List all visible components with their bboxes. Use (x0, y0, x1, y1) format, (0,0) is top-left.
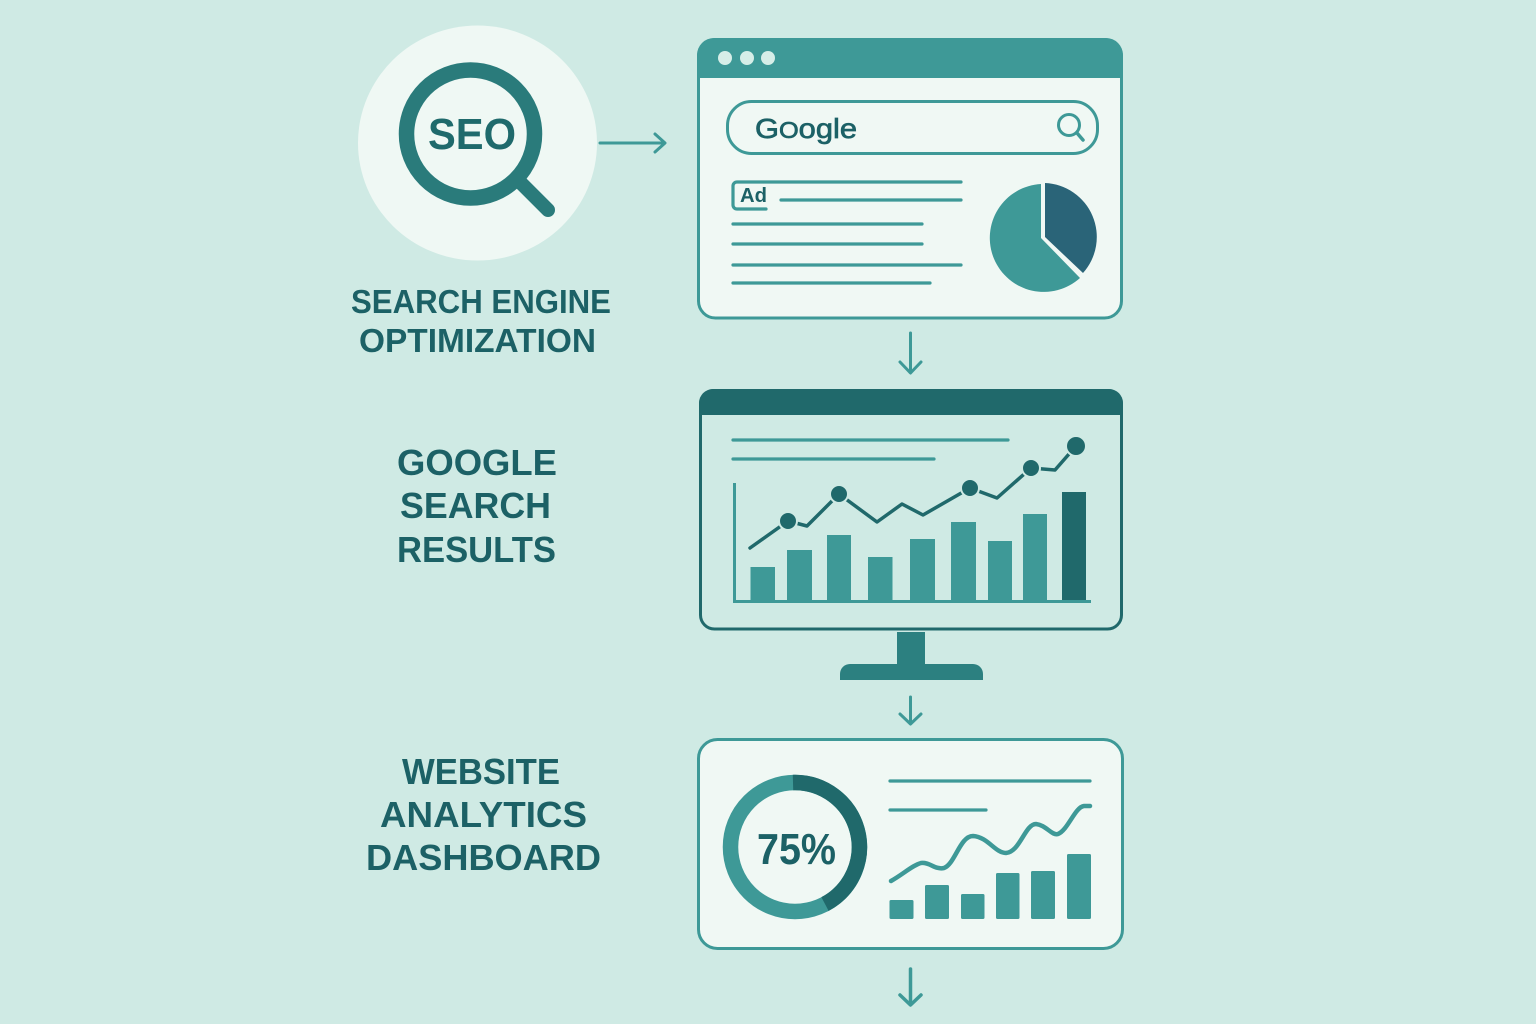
heading: website analytics dashboard: ANALYTICS (380, 794, 587, 835)
ad result text lines: Ad (740, 185, 767, 207)
search bar (728, 102, 1098, 154)
bar chart small (890, 854, 1091, 919)
heading: google search results: SEARCH (400, 485, 551, 526)
pie chart (990, 183, 1097, 292)
icon: SEO magnifying glass (358, 26, 597, 260)
panel: analytics dashboard (698, 740, 1122, 948)
heading: google search results: GOOGLE (397, 442, 557, 483)
arrow: monitor to dashboard (900, 697, 921, 724)
heading: search engine optimization: OPTIMIZATION (359, 322, 596, 359)
search bar: GOogle (755, 113, 857, 144)
panel: browser search window (697, 38, 1123, 318)
heading: website analytics dashboard: DASHBOARD (366, 837, 601, 878)
bar chart (734, 483, 1091, 602)
line chart (750, 436, 1086, 548)
heading: search engine optimization: SEARCH ENGINE (351, 283, 611, 320)
heading: google search results (397, 442, 557, 570)
donut chart: 75%: 75% (757, 825, 836, 874)
panel: monitor with growth chart (699, 389, 1123, 680)
icon: SEO magnifying glass: SEO (428, 110, 516, 159)
arrow: SEO to browser (600, 134, 665, 152)
trend line (891, 806, 1090, 881)
heading: search engine optimization (351, 283, 611, 359)
arrow: browser to monitor (900, 333, 921, 373)
arrow: dashboard downward (900, 969, 921, 1005)
ad result text lines (733, 182, 961, 283)
heading: website analytics dashboard: WEBSITE (402, 751, 560, 792)
heading: website analytics dashboard (366, 751, 601, 878)
icon: window dots (718, 51, 775, 65)
monitor stand (840, 632, 983, 680)
donut chart: 75% (730, 782, 860, 912)
heading: google search results: RESULTS (397, 529, 556, 570)
